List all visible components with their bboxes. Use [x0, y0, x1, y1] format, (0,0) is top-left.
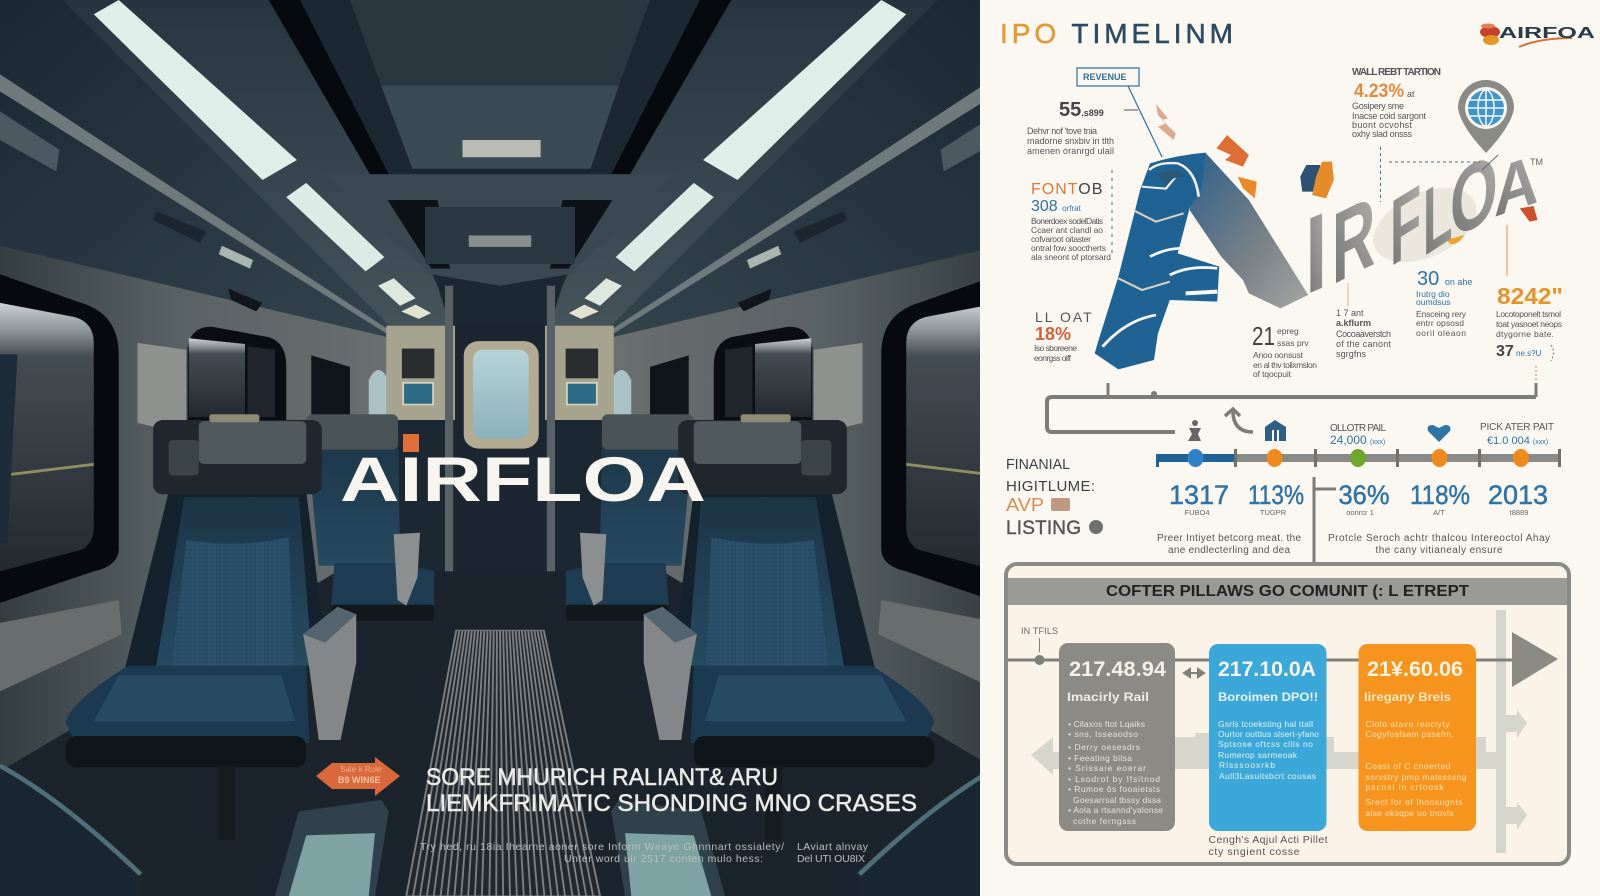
heading: financial highlights: AVP: [1006, 495, 1044, 515]
card: orange pillar: Clolo atavo reociyty: [1366, 719, 1450, 729]
stat: Fontob 308: Bonerdoex sodelDatis: [1031, 216, 1103, 226]
wordmark: rising IRFLOA letters: [1305, 133, 1538, 318]
stat: 8242: 8242": [1497, 283, 1563, 309]
stat: 30: [1416, 268, 1472, 338]
headline on photo: [426, 764, 917, 817]
logo: Airfoa top right: [1480, 24, 1596, 47]
stats sublabels: t8889: [1510, 508, 1528, 517]
small print on photo: Del UTI OU8IX: [797, 853, 865, 865]
heading: financial highlights: HIGITLUME:: [1006, 478, 1096, 495]
stat: Fontob 308: FONTOB: [1031, 181, 1103, 198]
wordmark: rising IRFLOA letters: I: [1305, 188, 1328, 318]
label: Pick ater pait: €1.0 004 (xxx): [1487, 435, 1548, 447]
caption under blue pillar: [1208, 834, 1328, 858]
stat: 8242: dtygorne bate.: [1496, 329, 1554, 339]
stat: 17: 1 7 ant: [1336, 308, 1364, 318]
card: orange pillar: alse oksqpe uo tnovls: [1366, 808, 1454, 818]
illustration: soft wash behind wordmark: [1362, 173, 1488, 277]
annotation: dotted leader lines: [1112, 147, 1498, 258]
stat: 30: oumdsus: [1416, 297, 1450, 307]
heading: financial highlights: FINANIAL: [1006, 456, 1070, 473]
stat: 55: madorne snxbiv in tlth: [1027, 136, 1114, 146]
card: blue pillar: Rumerop sarmeoak: [1218, 750, 1298, 760]
panel: core pillars: [1006, 564, 1569, 864]
stat: 8242: Locotoponelt tsmol: [1496, 309, 1561, 319]
highlights captions: ane endlecterling and dea: [1168, 545, 1290, 556]
stat: wall rest tartion: oxhy slad onsss: [1352, 129, 1412, 139]
stat: 55: [1027, 99, 1114, 156]
card: grey pillar: • Lsodrot by Ifsitnod: [1068, 774, 1160, 784]
stat: 8242: 37: [1496, 343, 1514, 360]
stat: 30: Irutrg dio: [1416, 289, 1450, 299]
stat: 21: of tqocpuit: [1253, 369, 1292, 379]
logo: Airfloa on photo: [340, 434, 706, 515]
small print on photo: LAviart alnvay: [797, 841, 869, 853]
label: Pick ater pait: PICK ATER PAIT: [1480, 422, 1554, 433]
icon: globe location pin: [1458, 80, 1514, 153]
stat: 55: amenen oranrgd ulall: [1027, 146, 1114, 156]
stats sublabels: A/T: [1433, 508, 1445, 517]
card: grey pillar: 217.48.94: [1069, 658, 1166, 681]
stats sublabels: [1184, 508, 1528, 517]
stat: 55: Dehvr nof 'tove tnia: [1027, 126, 1097, 136]
card: grey pillar: • Cilaxos ftot Lqaiks: [1068, 719, 1145, 729]
logo: Airfloa on photo: AIRFLOA: [340, 445, 706, 515]
stat: wall rest tartion: buont ocvohst: [1352, 120, 1412, 130]
icon: double arrow: [1184, 669, 1204, 677]
stat: 55: 55.s899: [1059, 99, 1104, 121]
card: orange pillar: [1358, 644, 1476, 831]
small print on photo: Try hed, ru 18ia Ihearne aoner sore Inform Weaye Ghnnnart ossialety/: [420, 841, 784, 853]
stat: LL OAT 18%: LL OAT: [1035, 309, 1094, 325]
card: blue pillar: Rlsssooxrkb: [1219, 760, 1275, 770]
callout: revenue tag and leader: REVENUE: [1083, 72, 1127, 82]
highlights captions: the cany vitianealy ensure: [1376, 545, 1503, 556]
wordmark: rising IRFLOA letters: R: [1332, 174, 1375, 307]
highlights captions: [1157, 533, 1550, 556]
card: orange pillar: 21¥.60.06: [1367, 658, 1463, 681]
stats row: 113%: [1248, 480, 1304, 510]
caption under blue pillar: Cengh's Aqjul Acti Pillet: [1208, 834, 1328, 846]
wordmark: rising IRFLOA letters: F: [1390, 163, 1421, 287]
stat: LL OAT 18%: 18%: [1035, 324, 1071, 344]
label: Olotr Pail: 24,000 (xxx): [1330, 433, 1385, 447]
card: orange pillar: Coast of C cnoerted: [1366, 761, 1451, 771]
heading: financial highlights: LISTING: [1006, 518, 1082, 539]
panel header band: [1008, 578, 1567, 605]
icon: orange double arrow sign: B9 WIN6E: [338, 775, 381, 785]
icon: house: [1265, 420, 1286, 441]
card: orange pillar: pscnsl in crtoosk: [1366, 782, 1444, 792]
stat: 21: ssas prv: [1277, 338, 1309, 348]
stat: Fontob 308: cofvaroot oitaster: [1031, 234, 1091, 244]
heading: financial highlights: [1006, 456, 1103, 539]
stat: 17: [1336, 283, 1391, 359]
wordmark: rising IRFLOA letters: A: [1494, 140, 1538, 233]
card: blue pillar: Sptsose oftcss cllls no: [1218, 739, 1313, 749]
stats row: 36%: [1338, 480, 1390, 510]
timeline connector: [1047, 366, 1536, 432]
panel: IPO timeline background: [980, 0, 1600, 896]
card: blue pillar: Aull3Lasuitsbcrt cousas: [1219, 771, 1316, 781]
stats sublabels: FUBO4: [1184, 508, 1210, 517]
small print on photo: [420, 841, 869, 865]
label: TM: TM: [1530, 157, 1543, 167]
icon: figure: [1188, 420, 1201, 441]
stat: Fontob 308: Ccaer ant clandl ao: [1031, 225, 1103, 235]
stat: 8242: toat yasnoet neops: [1496, 319, 1562, 329]
stat: wall rest tartion: Inacse coid sargont: [1352, 111, 1426, 121]
stats row: 2013: [1488, 480, 1548, 510]
card: orange pillar: Srect for of Ihoosugnts: [1366, 797, 1462, 807]
label: Olotr Pail: OLLOTR PAIL: [1330, 423, 1386, 434]
stats sublabels: oonrcr 1: [1346, 508, 1374, 517]
stat: Fontob 308: [1031, 181, 1111, 262]
icon: orange double arrow sign: [316, 757, 400, 796]
card: orange pillar: Cogyfosfsam pssefm,: [1366, 729, 1454, 739]
illustration: stylised A mark: [1094, 104, 1538, 370]
highlights captions: Protcle Seroch achtr thalcou Intereoctol Ahay: [1328, 533, 1550, 544]
stat: 17: of the canont: [1336, 339, 1391, 349]
card: orange pillar: Iiregany Breis: [1364, 690, 1451, 704]
stat: Fontob 308: ala sneont of ptorsard: [1031, 252, 1111, 262]
caption under blue pillar: cty sngient cosse: [1208, 846, 1300, 858]
highlights captions: Preer Intiyet betcorg meat. the: [1157, 533, 1301, 544]
stat: wall rest tartion: at: [1407, 89, 1415, 99]
stat: 21: epreg: [1277, 326, 1299, 336]
label: Olotr Pail: [1330, 423, 1386, 447]
stat: 17: sgrgfns: [1336, 349, 1366, 359]
title: IPO TIMELINM: [1000, 18, 1233, 49]
connector into pillars panel: [1314, 477, 1336, 563]
card: blue pillar: Gsrls tcoeksting hal ttall: [1218, 719, 1313, 729]
stat: 21: en al thv tolixmslon: [1253, 360, 1317, 370]
card: grey pillar: • Derry oesesdrs: [1068, 742, 1140, 752]
card: orange pillar: ssrvstry pmp malssssng: [1366, 772, 1467, 782]
card: blue pillar: [1209, 644, 1326, 831]
stat: wall rest tartion: Gosipery sme: [1352, 101, 1404, 111]
pillars axis arrow: [1008, 626, 1558, 687]
card: grey pillar: cothe ferngsss: [1073, 816, 1136, 826]
card: blue pillar: Boroimen DPO!!: [1218, 690, 1318, 704]
card: blue pillar: Ourtor outtlus slsert-yfano: [1218, 729, 1319, 739]
icon: orange double arrow sign: Sale ir Rule: [340, 765, 382, 774]
card: grey pillar: • Srissaie eoerar: [1068, 763, 1146, 773]
stats row: 118%: [1410, 480, 1470, 510]
stat: 8242: ne.s?U: [1516, 349, 1542, 358]
headline on photo: SORE MHURICH RALIANT& ARU: [426, 764, 778, 791]
stat: LL OAT 18%: [1034, 309, 1094, 363]
stat: 21: Anoo oonsust: [1253, 350, 1304, 360]
stat: 30: entrr opsosd: [1416, 318, 1464, 328]
stats row: [1169, 480, 1548, 510]
stats sublabels: TUGPR: [1260, 508, 1287, 517]
stat: 21: 21: [1252, 321, 1275, 351]
card: grey pillar: • Feeating bilsa: [1068, 753, 1132, 763]
stat: Fontob 308: ontral fow sooctherts: [1031, 243, 1106, 253]
card: blue pillar: 217.10.0A: [1218, 658, 1316, 681]
card: grey pillar: • Aola a rtsannd'yalonse: [1068, 805, 1163, 815]
stat: 30: ooril oleaon: [1416, 328, 1466, 338]
stats row: 1317: [1169, 480, 1229, 510]
card: grey pillar: [1059, 643, 1175, 831]
icon: heart: [1428, 425, 1450, 442]
small print on photo: Unter word uir 2517 conten mulo hess:: [564, 853, 763, 865]
stat: LL OAT 18%: eonrgss oiff: [1034, 353, 1072, 363]
illustration: carriage interior: [0, 0, 980, 896]
card: grey pillar: • Rumoe ôs fooaietsts: [1068, 784, 1160, 794]
stat: 17: a.kflurm: [1336, 318, 1371, 328]
timeline bar with milestones: [1156, 449, 1561, 467]
background arrows: [1031, 610, 1527, 853]
stat: 21: [1252, 321, 1317, 379]
stat: 30: Ensceing rery: [1416, 309, 1467, 319]
card: grey pillar: • sns, Isseaodso: [1068, 729, 1138, 739]
stat: wall rest tartion: 4.23%: [1354, 81, 1404, 102]
icon: curved arrow: [1225, 409, 1253, 432]
card: grey pillar: Imacirly Rail: [1067, 690, 1149, 704]
stat: Fontob 308: 308 orfrat: [1031, 198, 1082, 215]
pillars axis arrow: IN TFILS: [1021, 626, 1058, 636]
stat: wall rest tartion: WALL REBT TARTION: [1352, 67, 1441, 78]
stat: 8242: [1496, 225, 1563, 361]
card: grey pillar: Goesarrsal tbssy dssa: [1073, 795, 1161, 805]
label: Pick ater pait: [1480, 422, 1554, 447]
panel: train interior photo: [0, 0, 1000, 896]
wordmark: rising IRFLOA letters: O: [1450, 133, 1498, 260]
stat: wall rest tartion: [1352, 67, 1441, 139]
logo: Airfoa top right: AIRFOA: [1499, 25, 1596, 42]
callout: revenue tag and leader: [1077, 68, 1162, 157]
stat: 17: Cocoaaverstch: [1336, 329, 1391, 339]
panel heading: COFTER PILLAWS GO COMUNIT (: L ETREPT: [1106, 583, 1469, 600]
stat: LL OAT 18%: Iso sboreene: [1034, 343, 1077, 353]
headline on photo: LIEMKFRIMATIC SHONDING MNO CRASES: [426, 790, 917, 817]
wordmark: rising IRFLOA letters: L: [1423, 155, 1453, 277]
stat: 30: 30 on ahe: [1417, 268, 1472, 290]
